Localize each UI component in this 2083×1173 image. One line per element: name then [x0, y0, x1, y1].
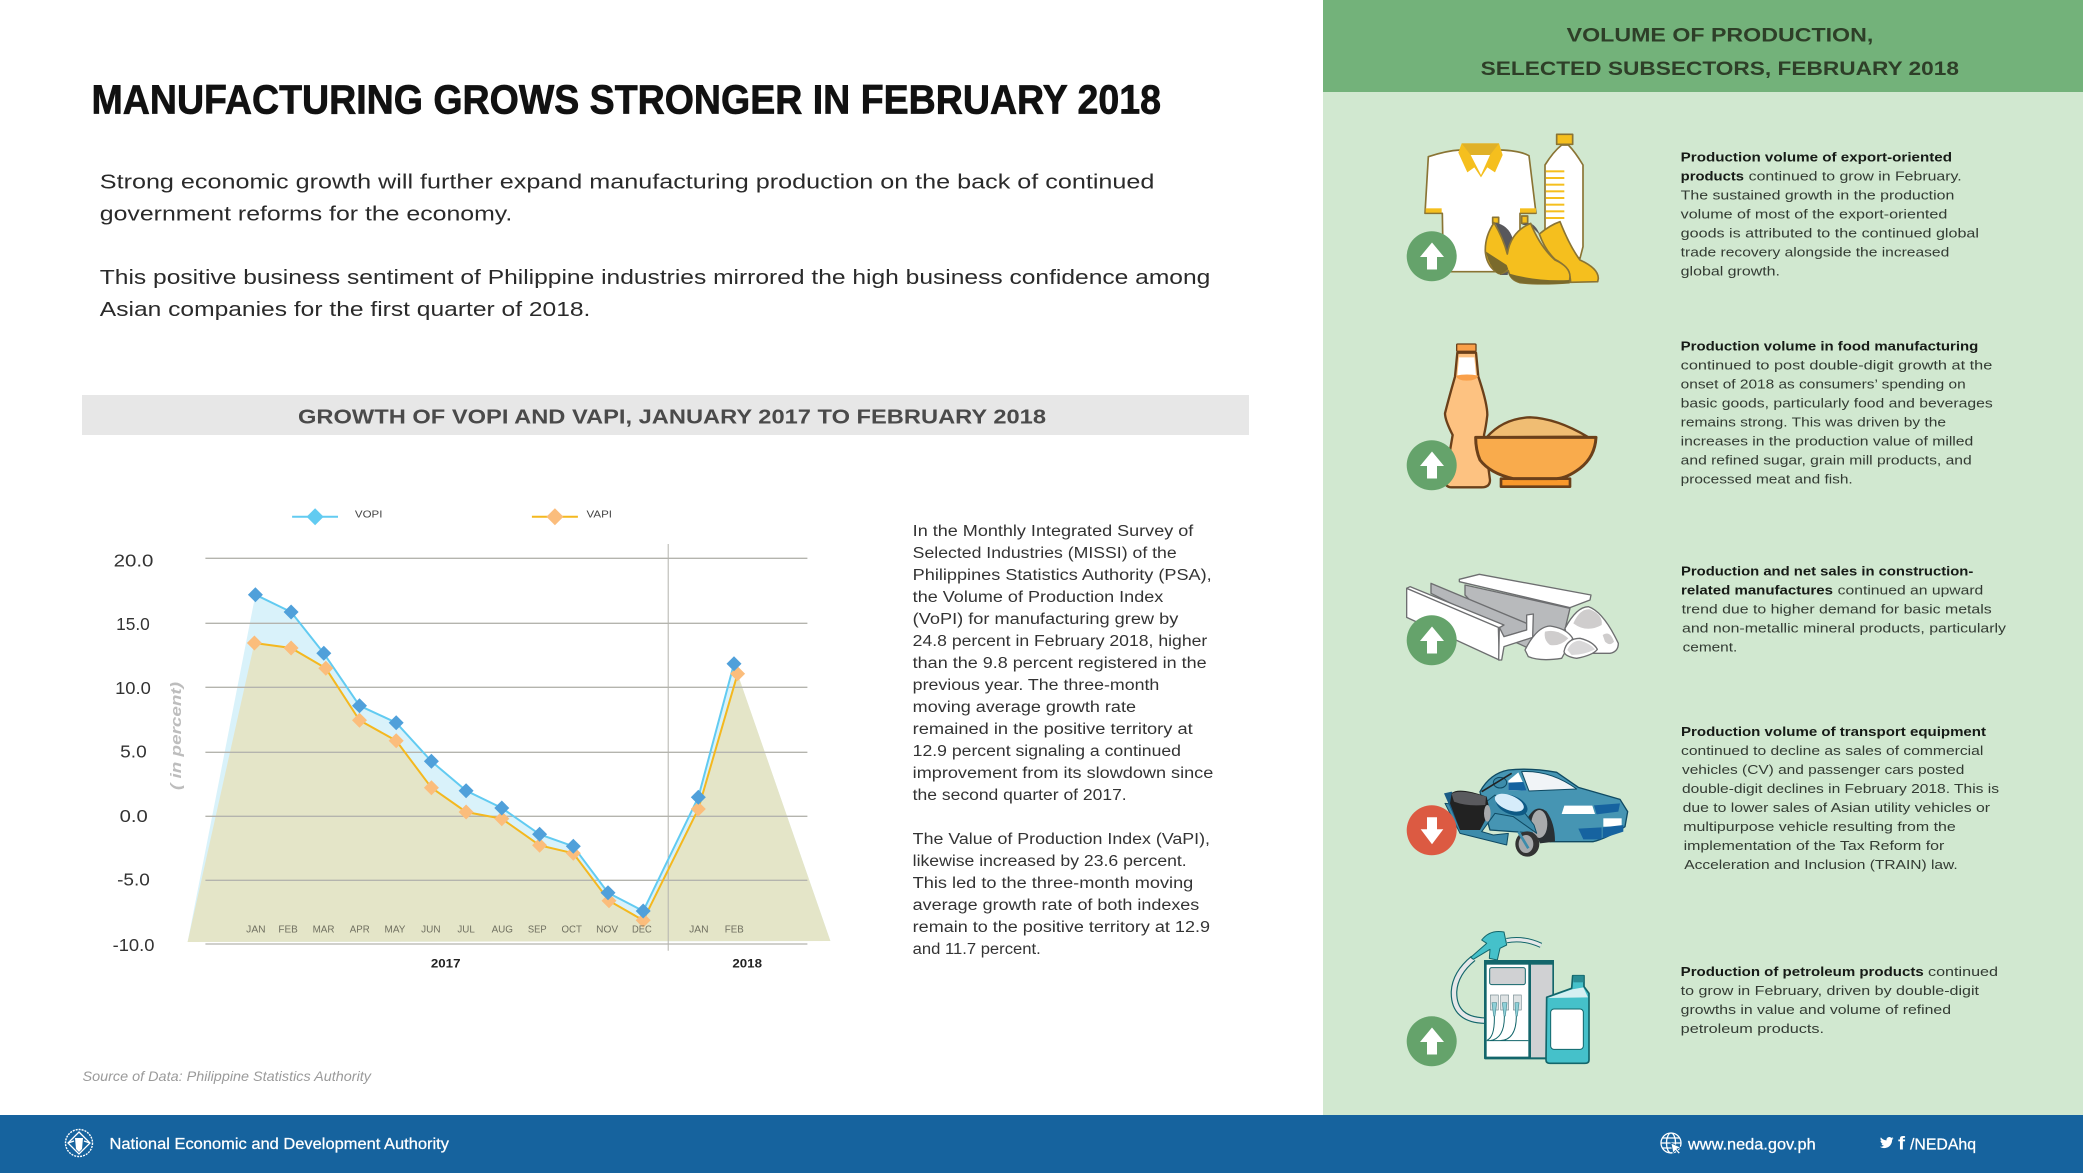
markers: VOPI — [248, 587, 742, 918]
chart commentary text: The Value of Production Index (VaPI), — [913, 831, 1210, 848]
source note: Source of Data: Philippine Statistics Authority — [82, 1068, 372, 1084]
y axis labels: 5.0 — [120, 741, 147, 761]
markers: VAPI — [247, 636, 745, 928]
text: export-oriented products: The sustained growth in the production — [1681, 188, 1954, 203]
text: construction-related manufactures: trend due to higher demand for basic metals — [1682, 602, 1992, 617]
month labels: DEC — [632, 925, 652, 936]
text: transport equipment: multipurpose vehicle resulting from the — [1683, 819, 1956, 834]
line chart: growth of VOPI and VAPI — [113, 508, 830, 971]
text: export-oriented products: continued to grow in February. — [1749, 169, 1962, 184]
line: VOPI — [255, 595, 734, 911]
chart commentary text: (VoPI) for manufacturing grew by — [913, 611, 1179, 628]
line: VAPI — [254, 643, 738, 920]
y axis labels: 15.0 — [116, 614, 150, 634]
icon: up arrow, food — [1407, 440, 1457, 490]
year labels — [431, 957, 762, 971]
text: food manufacturing: increases in the production value of milled — [1681, 434, 1973, 449]
chart commentary text: remained in the positive territory at — [913, 721, 1194, 738]
month labels: FEB — [725, 925, 744, 936]
chart commentary text: previous year. The three-month — [913, 677, 1159, 694]
month labels: OCT — [562, 925, 582, 936]
year labels: 2017 — [431, 957, 461, 971]
text: export-oriented products: volume of most of the export-oriented — [1681, 207, 1947, 222]
chart commentary text: 12.9 percent signaling a continued — [913, 743, 1181, 760]
text: transport equipment: Production volume of transport equipment — [1681, 724, 1987, 739]
panel heading — [1323, 0, 2083, 92]
legend — [292, 508, 612, 525]
text: petroleum products: petroleum products. — [1681, 1021, 1824, 1036]
month labels: SEP — [528, 925, 547, 936]
title: MANUFACTURING GROWS STRONGER IN FEBRUARY 2018 — [92, 76, 1161, 122]
chart commentary text: moving average growth rate — [913, 699, 1136, 716]
month labels: APR — [350, 925, 370, 936]
chart heading bar: GROWTH OF VOPI AND VAPI, JANUARY 2017 TO FEBRUARY 2018 — [298, 405, 1046, 428]
text: transport equipment: vehicles (CV) and passenger cars posted — [1682, 762, 1964, 777]
legend: VOPI — [355, 508, 382, 520]
icon: transport equipment (car, scooter) — [1444, 769, 1628, 857]
intro text block — [100, 170, 1210, 321]
text: construction-related manufactures — [1681, 564, 2006, 655]
text: transport equipment: implementation of the Tax Reform for — [1684, 838, 1945, 853]
text: food manufacturing: continued to post double-digit growth at the — [1681, 358, 1992, 373]
text: transport equipment: Acceleration and Inclusion (TRAIN) law. — [1684, 857, 1958, 872]
month labels: JAN — [246, 925, 266, 936]
text: construction-related manufactures: related manufactures — [1681, 583, 1833, 598]
y axis labels: -5.0 — [117, 869, 150, 889]
icon: up arrow, construction — [1407, 615, 1457, 665]
month labels: JAN — [689, 925, 708, 936]
chart commentary text: than the 9.8 percent registered in the — [913, 655, 1207, 672]
text: transport equipment — [1681, 724, 1999, 872]
intro text block: This positive business sentiment of Philippine industries mirrored the high business confidence among — [100, 266, 1210, 289]
icon: export goods (shirt, bottle, shoes) — [1425, 134, 1598, 284]
icon: globe — [1661, 1133, 1681, 1154]
chart commentary text: and 11.7 percent. — [913, 941, 1041, 958]
icon: NEDA seal — [66, 1130, 92, 1156]
text: construction-related manufactures: Production and net sales in construction- — [1681, 564, 1973, 579]
intro text block: Asian companies for the first quarter of 2018. — [100, 298, 590, 321]
text: export-oriented products: global growth. — [1681, 264, 1780, 279]
text: construction-related manufactures: and non-metallic mineral products, particularly — [1682, 621, 2006, 636]
text: food manufacturing: Production volume in food manufacturing — [1681, 339, 1978, 354]
text: food manufacturing: onset of 2018 as consumers’ spending on — [1681, 377, 1966, 392]
agency name: National Economic and Development Authority — [110, 1136, 449, 1153]
month labels: AUG — [492, 925, 513, 936]
text: transport equipment: due to lower sales of Asian utility vehicles or — [1683, 800, 1991, 815]
panel heading: SELECTED SUBSECTORS, FEBRUARY 2018 — [1481, 58, 1959, 80]
y axis labels: 10.0 — [115, 678, 151, 698]
chart commentary text: Selected Industries (MISSI) of the — [913, 545, 1177, 562]
chart commentary text: 24.8 percent in February 2018, higher — [913, 633, 1207, 650]
icon: twitter — [1880, 1137, 1894, 1148]
icon: construction materials (steel beams, rocks) — [1407, 574, 1618, 660]
social handle: /NEDAhq — [1910, 1136, 1976, 1153]
text: food manufacturing: processed meat and fish. — [1681, 472, 1853, 487]
icon: food and beverages (bottle, bowl) — [1445, 344, 1596, 487]
chart commentary text: This led to the three-month moving — [913, 875, 1193, 892]
text: petroleum products: growths in value and volume of refined — [1681, 1002, 1951, 1017]
chart commentary text: average growth rate of both indexes — [913, 897, 1200, 914]
intro text block: government reforms for the economy. — [100, 202, 512, 225]
text: food manufacturing: basic goods, particularly food and beverages — [1681, 396, 1993, 411]
panel: volume of production by subsector — [1323, 0, 2083, 1115]
month labels: JUL — [457, 925, 475, 936]
text: petroleum products: to grow in February, driven by double-digit — [1681, 983, 1979, 998]
chart commentary text: the Volume of Production Index — [913, 589, 1164, 606]
text: food manufacturing: remains strong. This was driven by the — [1681, 415, 1946, 430]
month labels: FEB — [278, 925, 298, 936]
text: petroleum products: continued — [1928, 964, 1998, 979]
month labels — [246, 925, 744, 936]
panel heading: VOLUME OF PRODUCTION, — [1567, 25, 1873, 47]
text: export-oriented products — [1681, 150, 1979, 279]
month labels: MAY — [384, 925, 406, 936]
chart commentary text: In the Monthly Integrated Survey of — [913, 523, 1194, 540]
icon: facebook: f — [1898, 1134, 1906, 1154]
chart commentary text: Philippines Statistics Authority (PSA), — [913, 567, 1212, 584]
chart commentary text — [913, 523, 1213, 958]
chart commentary text: improvement from its slowdown since — [913, 765, 1213, 782]
area: VAPI — [188, 643, 830, 942]
y axis labels: 20.0 — [114, 551, 154, 571]
area: VOPI — [188, 595, 830, 942]
text: construction-related manufactures: cement. — [1683, 640, 1737, 655]
text: food manufacturing: and refined sugar, grain mill products, and — [1681, 453, 1972, 468]
icon: down arrow, transport — [1407, 805, 1457, 855]
text: transport equipment: continued to decline as sales of commercial — [1681, 743, 1983, 758]
text: export-oriented products: goods is attributed to the continued global — [1681, 226, 1979, 241]
chart commentary text: likewise increased by 23.6 percent. — [913, 853, 1187, 870]
y axis unit: ( in percent) — [168, 682, 185, 790]
website: www.neda.gov.ph — [1687, 1136, 1816, 1153]
chart commentary text: the second quarter of 2017. — [913, 787, 1127, 804]
icon: up arrow, petroleum — [1407, 1016, 1457, 1066]
icon: up arrow, export goods — [1407, 231, 1457, 281]
month labels: JUN — [421, 925, 441, 936]
text: petroleum products — [1681, 964, 1998, 1036]
text: export-oriented products: products — [1681, 169, 1744, 184]
icon: petroleum (fuel pump, oil bottle) — [1454, 931, 1589, 1063]
text: transport equipment: double-digit declines in February 2018. This is — [1682, 781, 1999, 796]
month labels: NOV — [596, 925, 619, 936]
chart heading bar — [82, 395, 1249, 435]
year labels: 2018 — [732, 957, 762, 971]
y axis labels: 0.0 — [120, 806, 148, 826]
text: food manufacturing — [1681, 339, 1993, 487]
intro text block: Strong economic growth will further expand manufacturing production on the back of continued — [100, 170, 1154, 193]
text: export-oriented products: Production volume of export-oriented — [1681, 150, 1952, 165]
y axis labels: -10.0 — [113, 935, 155, 955]
chart commentary text: remain to the positive territory at 12.9 — [913, 919, 1210, 936]
text: export-oriented products: trade recovery alongside the increased — [1681, 245, 1949, 260]
month labels: MAR — [313, 925, 334, 936]
footer bar — [0, 1115, 2083, 1173]
y axis labels — [113, 551, 155, 955]
legend: VAPI — [586, 508, 612, 520]
text: construction-related manufactures: continued an upward — [1838, 583, 1983, 598]
text: petroleum products: Production of petroleum products — [1681, 964, 1924, 979]
